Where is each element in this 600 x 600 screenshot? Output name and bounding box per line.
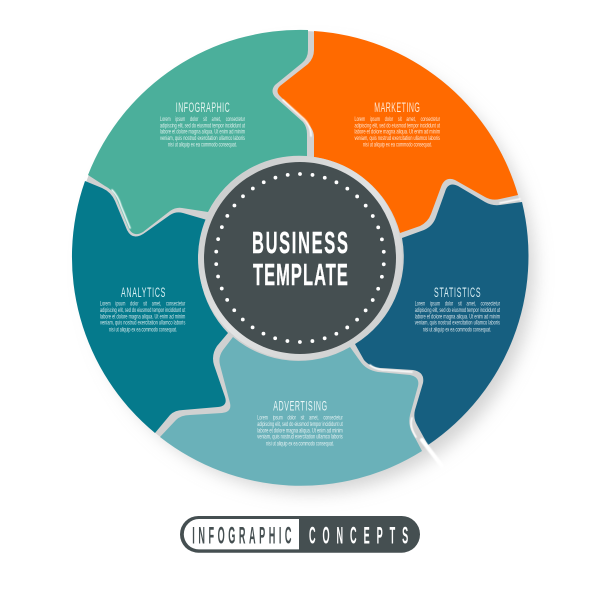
- text block: analytics: labore et dolore magna aliqua. Ut enim ad minim: [100, 314, 185, 320]
- pill text: concepts: CONCEPTS: [309, 522, 408, 549]
- heading: advertising: ADVERTISING: [273, 399, 327, 414]
- text block: analytics: nisi ut aliquip ex ea commodo consequat.: [109, 327, 177, 333]
- text block: marketing: nisi ut aliquip ex ea commodo consequat.: [363, 142, 432, 148]
- badge ring: [198, 156, 402, 360]
- text block: statistics: labore et dolore magna aliqua. Ut enim ad minim: [415, 314, 500, 320]
- badge disc: [204, 162, 396, 354]
- heading: infographic: INFOGRAPHIC: [176, 101, 230, 116]
- text block: advertising: nisi ut aliquip ex ea commodo consequat.: [266, 441, 334, 447]
- pill body: [180, 516, 420, 553]
- segment shape: infographic: [88, 30, 308, 234]
- dotted ring: [216, 174, 384, 342]
- text block: advertising: veniam, quis nostrud exercitation ullamco laboris: [257, 435, 343, 441]
- text block: advertising: adipiscing elit, sed do eiusmod tempor incididunt ut: [257, 422, 343, 428]
- text block: marketing: veniam, quis nostrud exercitation ullamco laboris: [354, 136, 440, 142]
- drop shadow of wheel: [88, 46, 534, 492]
- heading: statistics: STATISTICS: [434, 286, 480, 301]
- text block: infographic: nisi ut aliquip ex ea commodo consequat.: [168, 142, 237, 148]
- panel: statistics: [355, 184, 528, 445]
- footer pill: [180, 516, 420, 553]
- text block: infographic: Lorem ipsum dolor sit amet, consectetur: [160, 117, 245, 123]
- text block: statistics: Lorem ipsum dolor sit amet, consectetur: [415, 301, 500, 307]
- panel: marketing: [278, 31, 518, 233]
- text block: marketing: labore et dolore magna aliqua. Ut enim ad minim: [354, 130, 440, 136]
- text block: infographic: [160, 117, 245, 148]
- panel: advertising: [160, 337, 422, 486]
- segment shape: marketing: [278, 31, 518, 233]
- heading: marketing: MARKETING: [374, 101, 420, 116]
- center badge: [198, 156, 402, 360]
- text block: analytics: Lorem ipsum dolor sit amet, consectetur: [100, 301, 185, 307]
- gutter highlights: [112, 100, 520, 437]
- text block: analytics: adipiscing elit, sed do eiusmod tempor incididunt ut: [100, 308, 186, 314]
- text block: statistics: veniam, quis nostrud exercitation ullamco laboris: [415, 321, 500, 327]
- text block: statistics: [415, 301, 500, 333]
- title: [252, 227, 348, 292]
- text block: statistics: nisi ut aliquip ex ea commodo consequat.: [423, 327, 491, 333]
- text block: statistics: adipiscing elit, sed do eiusmod tempor incididunt ut: [415, 308, 500, 314]
- text block: marketing: [354, 117, 440, 148]
- text block: analytics: veniam, quis nostrud exercitation ullamco laboris: [100, 321, 185, 327]
- text block: infographic: adipiscing elit, sed do eiusmod tempor incididunt ut: [160, 123, 245, 129]
- text block: marketing: Lorem ipsum dolor sit amet, consectetur: [354, 117, 440, 123]
- text block: advertising: labore et dolore magna aliqua. Ut enim ad minim: [257, 428, 343, 434]
- segment shape: analytics: [72, 181, 228, 433]
- panel: infographic: [88, 30, 308, 234]
- text block: analytics: [100, 301, 186, 333]
- title: BUSINESS: [252, 227, 348, 260]
- segment shape: statistics: [355, 184, 528, 445]
- text block: infographic: veniam, quis nostrud exercitation ullamco laboris: [160, 136, 245, 142]
- segment shape: advertising: [160, 337, 422, 486]
- text block: marketing: adipiscing elit, sed do eiusmod tempor incididunt ut: [354, 123, 440, 129]
- text block: advertising: Lorem ipsum dolor sit amet, consectetur: [257, 416, 343, 422]
- title: TEMPLATE: [253, 259, 348, 292]
- pill text: infographic: INFOGRAPHIC: [192, 522, 291, 549]
- tail streak: [422, 440, 442, 466]
- gutter base of wheel: [73, 31, 527, 485]
- text block: infographic: labore et dolore magna aliqua. Ut enim ad minim: [160, 130, 245, 136]
- heading: analytics: ANALYTICS: [121, 285, 165, 301]
- pill white section: [184, 519, 299, 549]
- text block: advertising: [257, 416, 343, 447]
- panel: analytics: [72, 181, 228, 433]
